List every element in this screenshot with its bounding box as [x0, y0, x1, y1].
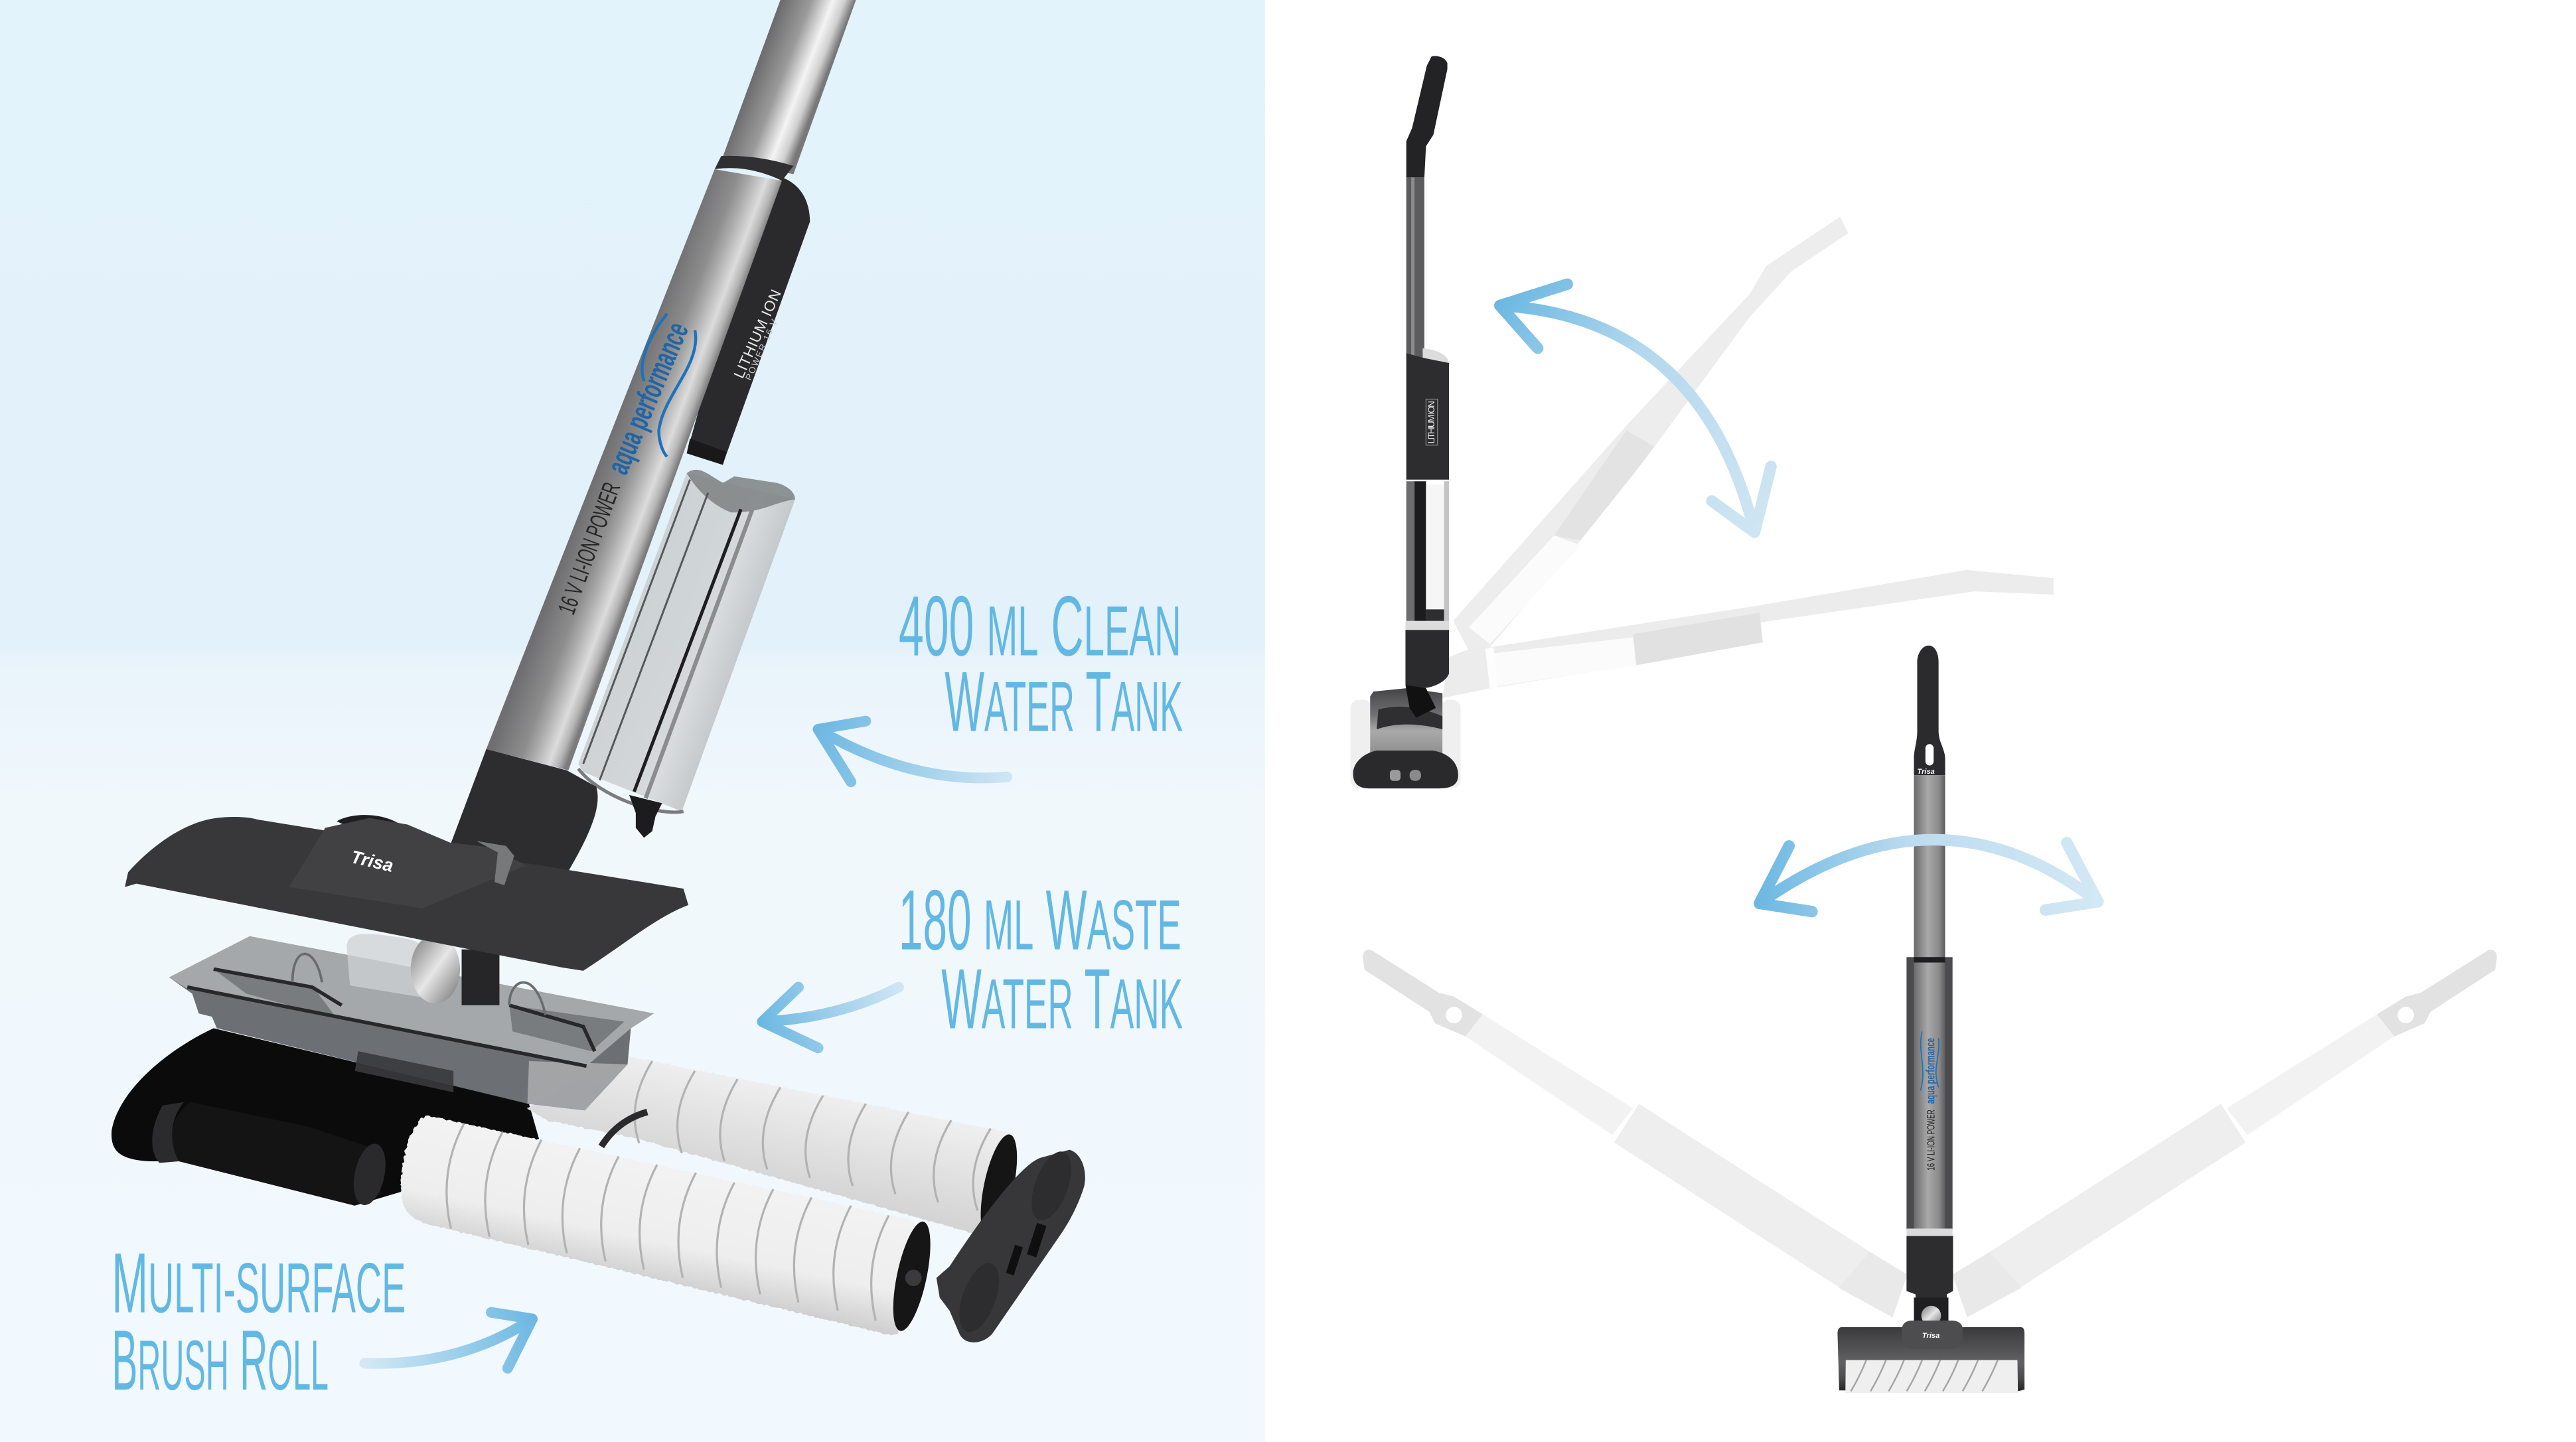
lower body: [1906, 1236, 1953, 1316]
label: 400 ml clean water tank: [899, 579, 1183, 749]
main body tube: [487, 169, 782, 770]
label: multi-surface brush roll: [112, 1236, 406, 1408]
shaft collar: [715, 156, 793, 180]
top cap of battery: [1422, 348, 1449, 378]
handle with hanging loop: Trisa: [1917, 768, 1935, 776]
foot: [1351, 685, 1460, 788]
arrow: to waste water tank: [762, 987, 899, 1048]
battery pack: POWER 16 V: [743, 317, 780, 382]
battery pack: [687, 177, 810, 465]
upper metal shaft: [721, 0, 856, 174]
label: 400 ml clean water tank: 400 ML CLEAN: [899, 579, 1181, 674]
ghost positions of tilting vacuum: [1442, 217, 2054, 698]
main unit: [1906, 957, 1953, 1230]
arrow: to clean water tank: [818, 721, 1007, 782]
label: 180 ml waste water tank: WATER TANK: [941, 951, 1183, 1046]
upper shaft: [1914, 775, 1945, 958]
ring: [1906, 1228, 1953, 1236]
clean water tank: [578, 470, 795, 837]
handle with hanging loop: [1914, 646, 1945, 776]
label: 400 ml clean water tank: WATER TANK: [945, 654, 1183, 749]
joint with metal disc: [1914, 1297, 1949, 1325]
main unit: aqua performance: [1923, 1038, 1937, 1104]
water tank side: [1406, 481, 1449, 622]
battery pack: LITHIUM ION: [730, 287, 785, 381]
foot: [1837, 1321, 2024, 1393]
arrow: swivel left and right: [1760, 839, 2098, 912]
roll bracket: [601, 1112, 647, 1147]
handle: [1406, 56, 1448, 177]
ghost: flat position: [1442, 570, 2054, 698]
cover plate with logo: [125, 815, 688, 971]
foot: Trisa: [1922, 1332, 1939, 1340]
ghost: swivel left: [1363, 950, 1908, 1317]
battery module: [1406, 353, 1449, 480]
front brush roll: [401, 1116, 938, 1335]
arrow: tilt back and forth: [1500, 284, 1771, 532]
neck joint: [447, 749, 598, 874]
panel: left blue background: [0, 0, 1265, 1442]
upright vacuum front view: [1837, 646, 2024, 1393]
arrow: to brush roll: [364, 1313, 532, 1368]
ghost: 45 degree tilt: [1453, 217, 1849, 650]
ghost: swivel right: [1952, 950, 2497, 1317]
ring: [1405, 621, 1449, 630]
black brush chassis and motor: [112, 1028, 542, 1208]
battery module: LITHIUM ION: [1426, 401, 1436, 443]
upright vacuum side view: [1351, 56, 1460, 788]
transparent waste water tank: [169, 934, 654, 1110]
exploded product view: [112, 0, 1085, 1342]
label: 180 ml waste water tank: 180 ML WASTE: [899, 873, 1181, 968]
ghost positions of swiveling vacuum: [1363, 950, 2497, 1317]
cover plate with logo: Trisa: [349, 846, 396, 876]
end cap: [937, 1146, 1085, 1342]
label: multi-surface brush roll: MULTI-SURFACE: [112, 1236, 406, 1331]
shaft: [1406, 177, 1424, 358]
lower dark body: [1405, 630, 1449, 688]
label: 180 ml waste water tank: [899, 873, 1183, 1046]
main body tube: 16 V LI-ION POWER: [552, 478, 625, 618]
rear brush roll: [528, 1056, 1024, 1240]
label: multi-surface brush roll: BRUSH ROLL: [112, 1313, 329, 1408]
main unit: 16 V LI-ION POWER: [1925, 1110, 1937, 1171]
main body tube: aqua performance: [599, 317, 695, 479]
